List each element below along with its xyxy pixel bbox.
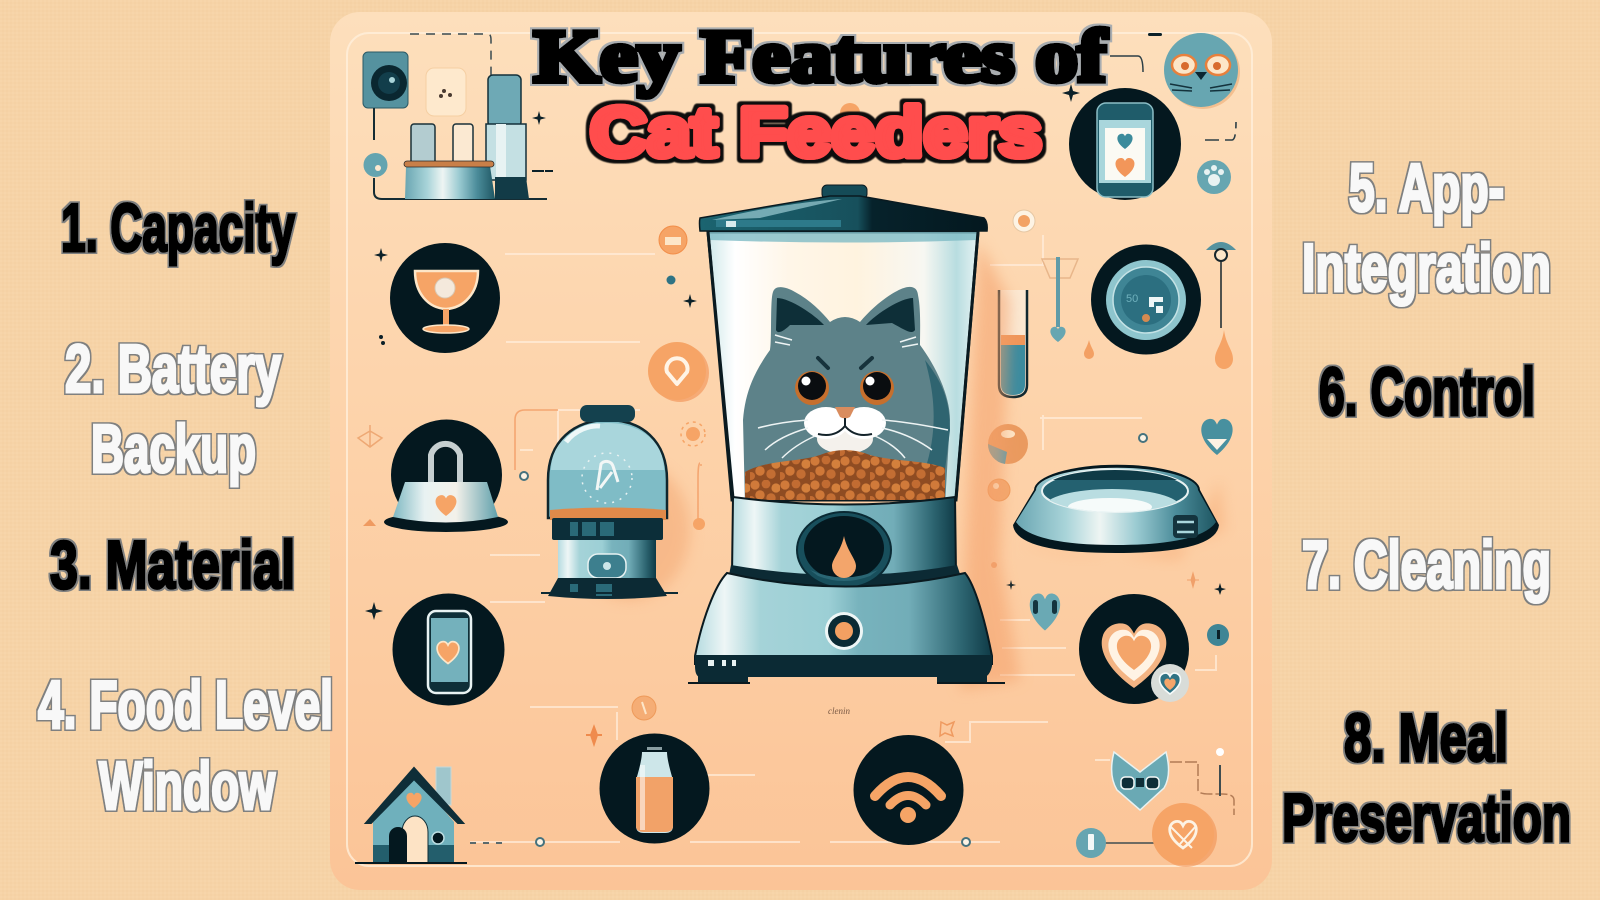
jar [708, 232, 978, 500]
outline star [940, 722, 954, 736]
icon: pendant drop [1206, 242, 1236, 369]
icon: heart plug [1030, 593, 1060, 630]
connector lines [470, 235, 1216, 842]
label 4 [38, 667, 333, 824]
lid [700, 185, 987, 231]
tall container [486, 75, 529, 199]
icon: goblet circle [390, 243, 500, 353]
small triangle [363, 519, 376, 526]
icon: lock bowl circle [384, 420, 508, 532]
columns [411, 124, 435, 164]
right labels [1282, 150, 1571, 856]
orange ball [988, 479, 1010, 501]
orange dot behind title [840, 103, 860, 123]
small script mark: clenin [828, 706, 850, 716]
icon: dial circle [1091, 244, 1201, 354]
orange sparkle [586, 727, 602, 744]
jar highlights [708, 232, 978, 242]
cat face shading [925, 360, 950, 470]
title [534, 16, 1108, 171]
sun [681, 422, 705, 446]
icon: bottom-right badges [1076, 803, 1217, 867]
label 4: Window [99, 748, 276, 824]
collar window [797, 512, 891, 588]
whiskers [758, 335, 948, 458]
icon: small feeder [541, 405, 690, 600]
icon: dial circle: 50 [1126, 293, 1138, 305]
sparkles and small marks [365, 33, 1236, 620]
main feeder [688, 185, 1020, 690]
feeder shadow [960, 240, 1020, 690]
stem [374, 108, 547, 199]
icon: wifi circle [854, 735, 964, 845]
cat ears [776, 298, 915, 332]
label 1: 1. Capacity [61, 190, 295, 266]
teal drop [666, 276, 676, 284]
icon: dog house [355, 767, 508, 863]
button [825, 612, 863, 650]
bowl [404, 161, 495, 199]
icon: bowl [1013, 465, 1225, 560]
orange badges and dots [358, 160, 1231, 846]
cat nose [835, 407, 855, 418]
icon: keyhole pin [1207, 624, 1229, 646]
central panel [330, 12, 1272, 890]
label 5: 5. App- [1349, 150, 1504, 226]
cat brows [818, 358, 872, 368]
icon: teal heart right [1201, 419, 1233, 455]
label 2: 2. Battery [65, 331, 281, 407]
left diamond [358, 425, 382, 447]
connector rings [520, 434, 1147, 846]
ring badge [1013, 210, 1035, 232]
label 8 [1282, 700, 1571, 856]
label 2: Backup [91, 411, 256, 487]
icon: funnel arrow [1042, 257, 1078, 342]
top-left feeder cluster [363, 34, 547, 199]
cat muzzle [804, 407, 886, 454]
collar [728, 497, 962, 591]
orange ball lower [632, 696, 656, 720]
kibble [745, 450, 945, 505]
small teal dot [364, 153, 388, 177]
icon: bottle circle [600, 734, 710, 844]
title line 2: Cat Feeders [590, 93, 1042, 171]
drop pin badge [648, 342, 709, 402]
end ball of connector [693, 518, 705, 530]
icon: cat face badge [1164, 33, 1240, 109]
title line 1: Key Features of [534, 16, 1108, 98]
left labels [38, 190, 333, 824]
cat body [743, 287, 950, 505]
cat eyes [795, 371, 894, 405]
label 2 [65, 331, 281, 487]
label 8: 8. Meal [1344, 700, 1508, 776]
panel inner outline [347, 33, 1252, 866]
orange sparkle right [1187, 573, 1199, 587]
icon: heart circle [1079, 594, 1189, 704]
globe [988, 424, 1028, 464]
icon: cat shield [1112, 748, 1234, 815]
label 3: 3. Material [50, 527, 295, 603]
label 4: 4. Food Level [38, 667, 333, 743]
base [688, 573, 1005, 683]
tag badge [659, 226, 687, 254]
small paw badge [1197, 160, 1231, 194]
label 5 [1302, 150, 1551, 306]
small drop [1084, 340, 1094, 359]
icon: phone circle top right [1069, 88, 1181, 200]
icon: phone heart circle [392, 594, 504, 706]
feet [698, 673, 748, 683]
dashed connector [410, 34, 491, 76]
card [426, 68, 466, 116]
icon: test tube [999, 290, 1027, 397]
camera box [363, 52, 408, 108]
cat [743, 287, 950, 505]
